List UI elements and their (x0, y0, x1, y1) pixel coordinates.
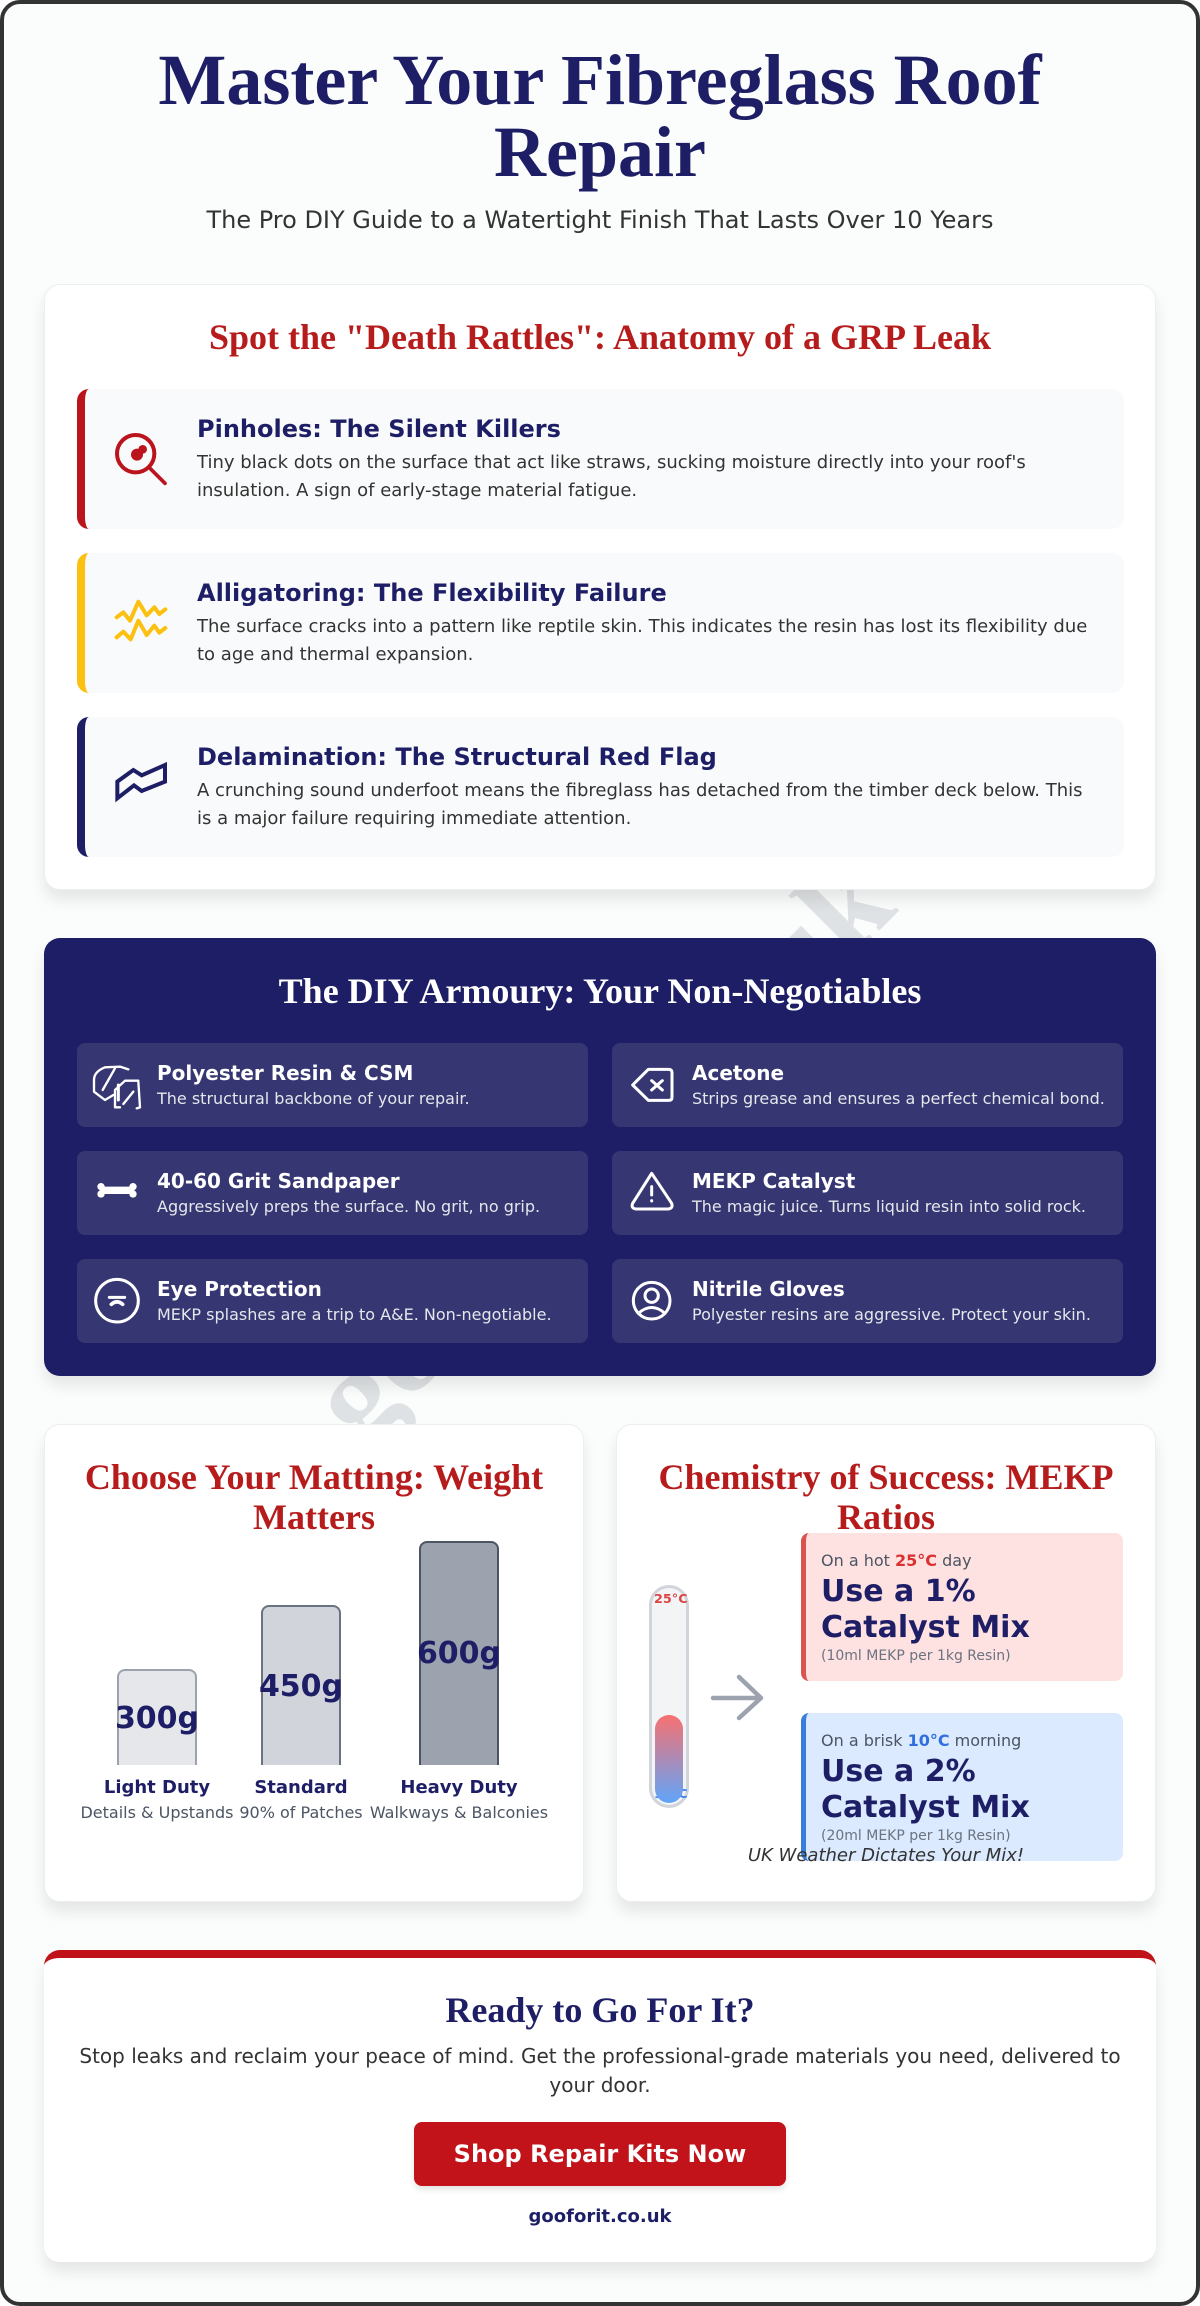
heading: mekp ratios: Chemistry of Success: MEKP (659, 1457, 1113, 1497)
item: acetone (612, 1043, 1123, 1127)
ratio: 1 percent (821, 1574, 1030, 1645)
text: alligatoring (196, 616, 1087, 665)
button: shop (414, 2122, 786, 2186)
heading: delamination: Delamination: The Structural Red Flag (197, 743, 717, 771)
label: polyester resin: Polyester Resin & CSM (157, 1061, 413, 1085)
text: pinholes: Tiny black dots on the surface that act like straws, sucking moisture directly into your roof's (197, 452, 1026, 473)
icon: lifted layer (115, 762, 167, 802)
label: acetone: Acetone (692, 1061, 784, 1085)
button: shop: Shop Repair Kits Now (454, 2140, 746, 2168)
panel: mekp ratios (616, 1424, 1156, 1902)
arrow (710, 1674, 764, 1720)
ratio: 1 percent: Catalyst Mix (821, 1610, 1030, 1645)
text: hot condition: On a hot 25°C day (821, 1551, 972, 1570)
item: polyester resin (77, 1043, 588, 1127)
value: 600g: 600g (417, 1636, 501, 1671)
ratio: 2 percent: Catalyst Mix (821, 1790, 1030, 1825)
ratio: 2 percent (821, 1754, 1030, 1825)
title: Repair (494, 112, 706, 192)
item: nitrile gloves (612, 1259, 1123, 1343)
heading: alligatoring: Alligatoring: The Flexibility Failure (197, 579, 667, 607)
heading: death rattles: Spot the "Death Rattles": Anatomy of a GRP Leak (209, 317, 991, 357)
callout: brisk morning (801, 1713, 1123, 1861)
text: alligatoring: to age and thermal expansion. (197, 644, 473, 665)
bar chart: mat weights (80, 1541, 548, 1822)
note: details: Details & Upstands (80, 1803, 234, 1822)
panel: diy armoury (44, 938, 1156, 1376)
text: pinholes (196, 452, 1026, 501)
label: 25 degrees: 25°C (654, 1592, 688, 1607)
value: 450g: 450g (259, 1669, 343, 1704)
bar: 450g (261, 1605, 341, 1765)
title (158, 40, 1042, 192)
subtitle: The Pro DIY Guide to a Watertight Finish That Lasts Over 10 Years (206, 206, 994, 234)
text: hot dose: (10ml MEKP per 1kg Resin) (821, 1648, 1011, 1664)
label: sandpaper: 40-60 Grit Sandpaper (157, 1169, 400, 1193)
callout: hot day (801, 1533, 1123, 1681)
label: light duty: Light Duty (104, 1777, 210, 1798)
text: nitrile gloves: Polyester resins are aggressive. Protect your skin. (692, 1305, 1091, 1324)
card: pinholes (77, 389, 1124, 529)
icon: gloves (632, 1280, 672, 1320)
label: eye protection: Eye Protection (157, 1277, 322, 1301)
heading: mekp ratios: Ratios (837, 1497, 935, 1537)
heading: matting: Choose Your Matting: Weight (85, 1457, 543, 1497)
heading: pinholes: Pinholes: The Silent Killers (197, 415, 561, 443)
item: sandpaper (77, 1151, 588, 1235)
text: acetone: Strips grease and ensures a perfect chemical bond. (692, 1089, 1105, 1108)
note: walkways: Walkways & Balconies (370, 1803, 548, 1822)
icon: eye protection (94, 1278, 140, 1324)
label: standard: Standard (254, 1777, 348, 1798)
card: delamination (77, 717, 1124, 857)
bar: 600g (419, 1541, 499, 1765)
icon: magnifier with pinhole (115, 433, 167, 486)
watermark: gooforit.co.uk (281, 830, 919, 1468)
link: website: gooforit.co.uk (529, 2206, 671, 2227)
thermometer (649, 1585, 689, 1808)
label: heavy duty: Heavy Duty (400, 1777, 518, 1798)
heading: matting: Matters (253, 1497, 375, 1537)
text: alligatoring: The surface cracks into a pattern like reptile skin. This indicates the resin has lost its flexibility due (197, 616, 1087, 637)
bar: 300g (117, 1669, 197, 1765)
label: mekp catalyst: MEKP Catalyst (692, 1169, 855, 1193)
text: mekp catalyst: The magic juice. Turns liquid resin into solid rock. (692, 1197, 1086, 1216)
label: nitrile gloves: Nitrile Gloves (692, 1277, 845, 1301)
item: eye protection (77, 1259, 588, 1343)
text: call to action (79, 2044, 1121, 2097)
icon: cracks (114, 600, 168, 642)
title: Master Your Fibreglass Roof (158, 40, 1042, 120)
text: call to action: your door. (549, 2073, 651, 2097)
card: alligatoring (77, 553, 1124, 693)
text: pinholes: insulation. A sign of early-stage material fatigue. (197, 480, 637, 501)
heading: matting (85, 1457, 543, 1537)
text: delamination (197, 780, 1082, 829)
text: delamination: is a major failure requiring immediate attention. (197, 808, 631, 829)
text: delamination: A crunching sound underfoot means the fibreglass has detached from the timber deck below. This (197, 780, 1082, 801)
panel: death rattles (44, 284, 1156, 890)
panel: call to action (44, 1950, 1156, 2262)
icon: acetone (631, 1068, 674, 1102)
ratio: 2 percent: Use a 2% (821, 1754, 976, 1789)
heading: armoury: The DIY Armoury: Your Non-Negotiables (279, 971, 921, 1011)
heading: mekp ratios (659, 1457, 1113, 1537)
panel: matting (44, 1424, 584, 1902)
note: patches: 90% of Patches (239, 1803, 363, 1822)
text: eye protection: MEKP splashes are a trip to A&E. Non-negotiable. (157, 1305, 552, 1324)
text: sandpaper: Aggressively preps the surface. No grit, no grip. (157, 1197, 540, 1216)
thermometer fill (655, 1715, 683, 1803)
icon: sandpaper (97, 1183, 137, 1198)
label: 10 degrees: 10°C (654, 1787, 688, 1802)
ratio: 1 percent: Use a 1% (821, 1574, 976, 1609)
text: cold dose: (20ml MEKP per 1kg Resin) (821, 1828, 1011, 1844)
text: cold condition: On a brisk 10°C morning (821, 1731, 1021, 1750)
caption: uk weather: UK Weather Dictates Your Mix! (748, 1845, 1024, 1866)
item: mekp catalyst (612, 1151, 1123, 1235)
icon: warning triangle (630, 1172, 674, 1210)
heading: call to action: Ready to Go For It? (445, 1990, 755, 2030)
value: 300g: 300g (115, 1701, 199, 1736)
icon: resin and mat (92, 1066, 142, 1110)
text: polyester resin: The structural backbone of your repair. (157, 1089, 470, 1108)
text: call to action: Stop leaks and reclaim your peace of mind. Get the professional-grade materials you need, delivered to (79, 2044, 1121, 2068)
